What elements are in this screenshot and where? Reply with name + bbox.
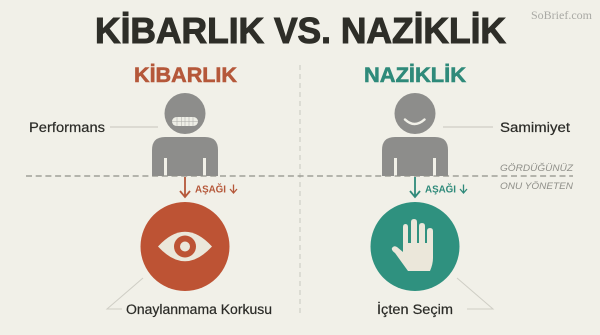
label: onu yöneten: ONU YÖNETEN: [500, 181, 573, 192]
arrow: small down right: [460, 184, 467, 193]
heading: naziklik: NAZİKLİK: [364, 63, 466, 87]
title: KİBARLIK VS. NAZİKLİK: [95, 10, 506, 51]
label: performans: Performans: [29, 120, 105, 135]
arrow: small down left: [230, 184, 237, 193]
label: samimiyet: Samimiyet: [500, 120, 570, 135]
leader line: içten seçim: [457, 278, 493, 309]
panel: naziklik: [364, 63, 570, 317]
leader line: performans: [110, 126, 158, 128]
icon: hand in circle: [370, 202, 460, 291]
figure: smiling person: [382, 93, 448, 176]
label: içten seçim: İçten Seçim: [377, 302, 453, 317]
label: gördüğünüz: GÖRDÜĞÜNÜZ: [500, 163, 574, 174]
panel: kibarlık: [29, 63, 272, 317]
heading: kibarlık: KİBARLIK: [134, 63, 237, 87]
leader line: samimiyet: [443, 126, 493, 128]
label: aşağı left: AŞAĞI: [195, 182, 226, 196]
leader line: onaylanmama korkusu: [107, 278, 143, 309]
label: aşağı right: AŞAĞI: [425, 182, 456, 196]
icon: eye in circle: [140, 202, 230, 291]
divider: waterline: [26, 175, 573, 177]
figure: forced smile person: [152, 93, 218, 176]
arrow: down left: [180, 177, 190, 197]
label: onaylanmama korkusu: Onaylanmama Korkusu: [126, 302, 272, 317]
arrow: down right: [410, 177, 420, 197]
watermark: SoBrief.com: [531, 10, 592, 22]
